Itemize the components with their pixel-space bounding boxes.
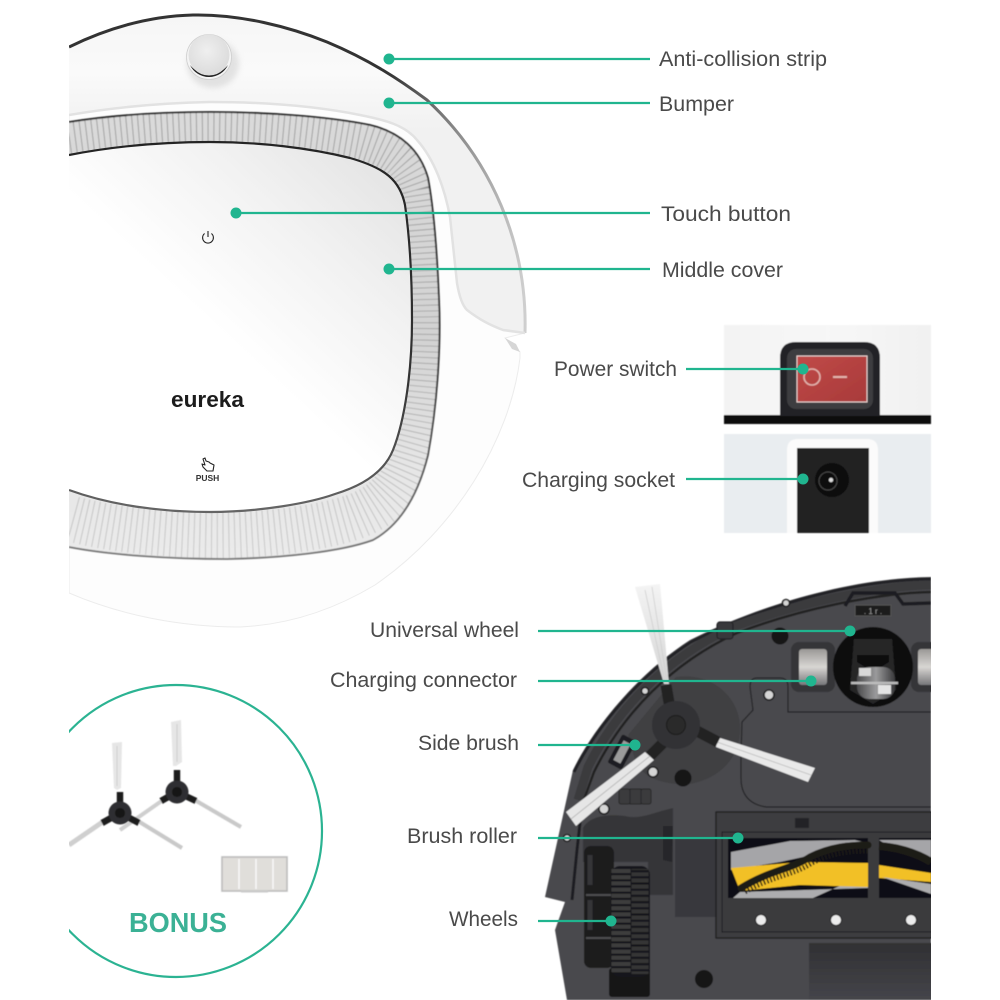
rim band <box>578 585 931 800</box>
filter <box>222 857 287 892</box>
universal wheel well <box>833 627 913 707</box>
bumper gap <box>572 805 582 900</box>
chambers <box>728 838 868 898</box>
panel background <box>724 434 931 533</box>
brush bristles <box>635 584 669 684</box>
callout: brush roller <box>407 825 744 848</box>
icon: power <box>203 231 213 243</box>
holes <box>674 628 788 988</box>
notch bevel <box>505 338 520 352</box>
yellow roller <box>731 862 868 891</box>
side brush 1 <box>69 742 182 848</box>
callout: universal wheel: Universal wheel <box>370 619 519 642</box>
tyre <box>611 866 650 977</box>
wheel well <box>609 968 650 997</box>
power switch photo <box>724 325 931 424</box>
push label: PUSH <box>196 473 219 483</box>
body silhouette <box>69 116 526 628</box>
callout: bumper: Bumper <box>659 93 734 116</box>
drive wheel <box>584 846 650 997</box>
charging contact right <box>910 642 931 692</box>
robot top view <box>69 15 525 627</box>
right roller flaps <box>879 840 931 860</box>
bonus accessories circle <box>69 684 324 978</box>
charging contact left <box>791 642 835 692</box>
bay frame <box>716 812 946 938</box>
callout: charging socket <box>522 469 808 492</box>
bumper <box>69 48 524 332</box>
robot underside view <box>545 577 946 1000</box>
ring fill <box>69 112 440 559</box>
white frame <box>787 439 878 533</box>
decorative ring <box>69 112 440 559</box>
callout: touch button: Touch button <box>661 203 791 226</box>
latch <box>795 818 809 828</box>
rim notch <box>845 593 931 606</box>
anti-collision strip edge <box>69 15 525 333</box>
black base <box>724 415 931 424</box>
callout: middle cover: Middle cover <box>662 259 783 282</box>
screws <box>564 600 790 892</box>
bottom plate <box>809 943 934 1000</box>
icon: push hand <box>202 458 214 471</box>
rocker symbols <box>804 369 847 385</box>
middle cover <box>69 142 412 512</box>
brush recess <box>628 676 740 784</box>
red rocker <box>797 356 867 402</box>
socket <box>815 463 849 497</box>
callout: touch button <box>230 203 791 226</box>
roller spiral bristles <box>741 845 868 888</box>
side brush 2 <box>120 720 241 830</box>
callout: anti-collision strip <box>384 48 827 71</box>
callout: power switch: Power switch <box>554 358 677 381</box>
sensor connector: . 1 r . <box>864 607 882 616</box>
side sensor <box>608 734 633 770</box>
dome button <box>186 34 232 80</box>
ring ticks <box>69 127 426 535</box>
hub <box>584 846 614 968</box>
callout: wheels: Wheels <box>449 908 518 931</box>
switch housing <box>780 342 880 416</box>
black plate <box>797 448 869 533</box>
callout: middle cover <box>384 259 783 282</box>
caster wheel <box>857 667 895 699</box>
lower screws <box>756 914 916 926</box>
callout: charging connector <box>330 669 816 692</box>
side brush hub <box>566 584 815 826</box>
callout: bumper <box>384 93 734 116</box>
callout: universal wheel <box>370 619 856 642</box>
status boxes <box>619 789 651 804</box>
dome button shadow <box>187 40 239 88</box>
callout: power switch <box>554 358 808 381</box>
wheel housing <box>583 808 673 895</box>
callout: side brush: Side brush <box>418 732 519 755</box>
sensor connector <box>856 606 890 616</box>
dust bin outline <box>741 678 931 807</box>
circle outline <box>69 684 324 978</box>
bonus label: BONUS <box>129 907 227 938</box>
ring outer line <box>69 112 440 559</box>
outer rim <box>574 579 931 772</box>
callout: anti-collision strip: Anti-collision strip <box>659 48 827 71</box>
callout: wheels <box>449 908 616 931</box>
callout: side brush <box>418 732 640 755</box>
roller flaps <box>731 840 868 870</box>
body silhouette <box>545 577 931 1000</box>
callout: charging connector: Charging connector <box>330 669 517 692</box>
rim inner groove <box>582 592 931 805</box>
bumper seam <box>69 102 525 333</box>
charging socket photo <box>724 434 931 533</box>
brush roller bay <box>716 812 946 938</box>
panel background <box>724 325 931 415</box>
brand logo: eureka <box>171 387 245 412</box>
callout: charging socket: Charging socket <box>522 469 675 492</box>
callout: brush roller: Brush roller <box>407 825 517 848</box>
rim tab <box>717 622 733 639</box>
